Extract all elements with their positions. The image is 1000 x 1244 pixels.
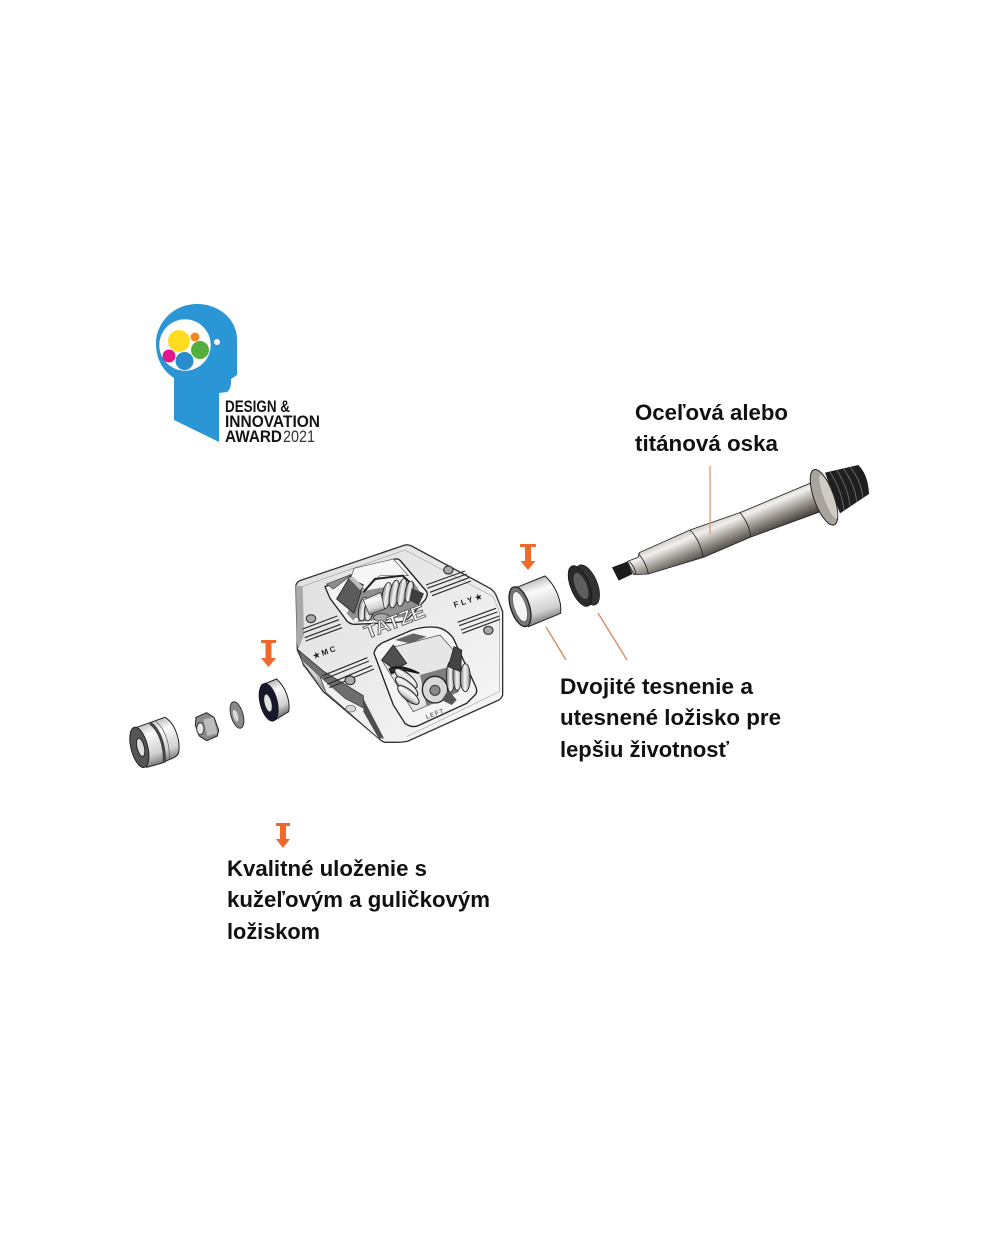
MC mark: ★MC — [312, 644, 339, 661]
exploded view: left hardware — [126, 679, 289, 769]
end cap — [126, 717, 179, 769]
lock nut — [195, 713, 219, 741]
label: seal and bearing: utesnené ložisko pre — [560, 705, 781, 730]
bearing — [256, 679, 289, 723]
label: axle: titánová oska — [635, 431, 779, 456]
label: cone and ball bearing: kužeľovým a guličkovým — [227, 887, 490, 912]
award wordmark — [225, 398, 320, 446]
exploded view: right hardware and axle — [505, 465, 869, 629]
leader line: seal — [598, 613, 627, 660]
arrow: bearing left — [261, 640, 276, 667]
arrow: legend — [276, 823, 290, 848]
logo: design and innovation award — [156, 304, 320, 446]
icon: coloured circles in head — [159, 319, 220, 371]
top window — [325, 559, 427, 624]
bottom window — [374, 627, 477, 727]
label: seal and bearing: Dvojité tesnenie a — [560, 674, 754, 699]
label: axle — [635, 400, 788, 456]
pedal body outline — [296, 545, 503, 742]
axle — [612, 465, 869, 581]
label: cone and ball bearing: Kvalitné uloženie s — [227, 856, 427, 881]
award wordmark: INNOVATION — [225, 413, 320, 431]
sleeve bearing — [505, 576, 561, 629]
bolts — [306, 566, 493, 685]
exploded view: pedal body — [296, 545, 503, 742]
icon: blue head — [156, 304, 237, 442]
award wordmark: DESIGN & — [225, 398, 290, 416]
leader line: axle — [709, 466, 711, 534]
award wordmark: 2021 — [283, 428, 315, 446]
label: cone and ball bearing: ložiskom — [227, 919, 320, 944]
label: seal and bearing: lepšiu životnosť — [560, 737, 729, 762]
label: seal and bearing — [560, 674, 781, 762]
label: axle: Oceľová alebo — [635, 400, 788, 425]
leader line: bearing — [546, 627, 566, 660]
TATZE logo: TATZE — [361, 600, 428, 643]
label: cone and ball bearing — [227, 856, 490, 944]
LEFT mark: LEFT — [425, 708, 446, 721]
ribs — [303, 571, 500, 688]
left side shading — [296, 585, 304, 648]
bottom clip mechanism — [382, 635, 470, 712]
top clip mechanism — [337, 576, 424, 622]
washer — [227, 700, 247, 730]
arrow: bearing right — [520, 544, 536, 570]
lower left flange — [298, 650, 384, 738]
double seal — [563, 561, 605, 610]
award wordmark: AWARD — [225, 428, 282, 446]
FLY mark: FLY★ — [453, 591, 486, 610]
